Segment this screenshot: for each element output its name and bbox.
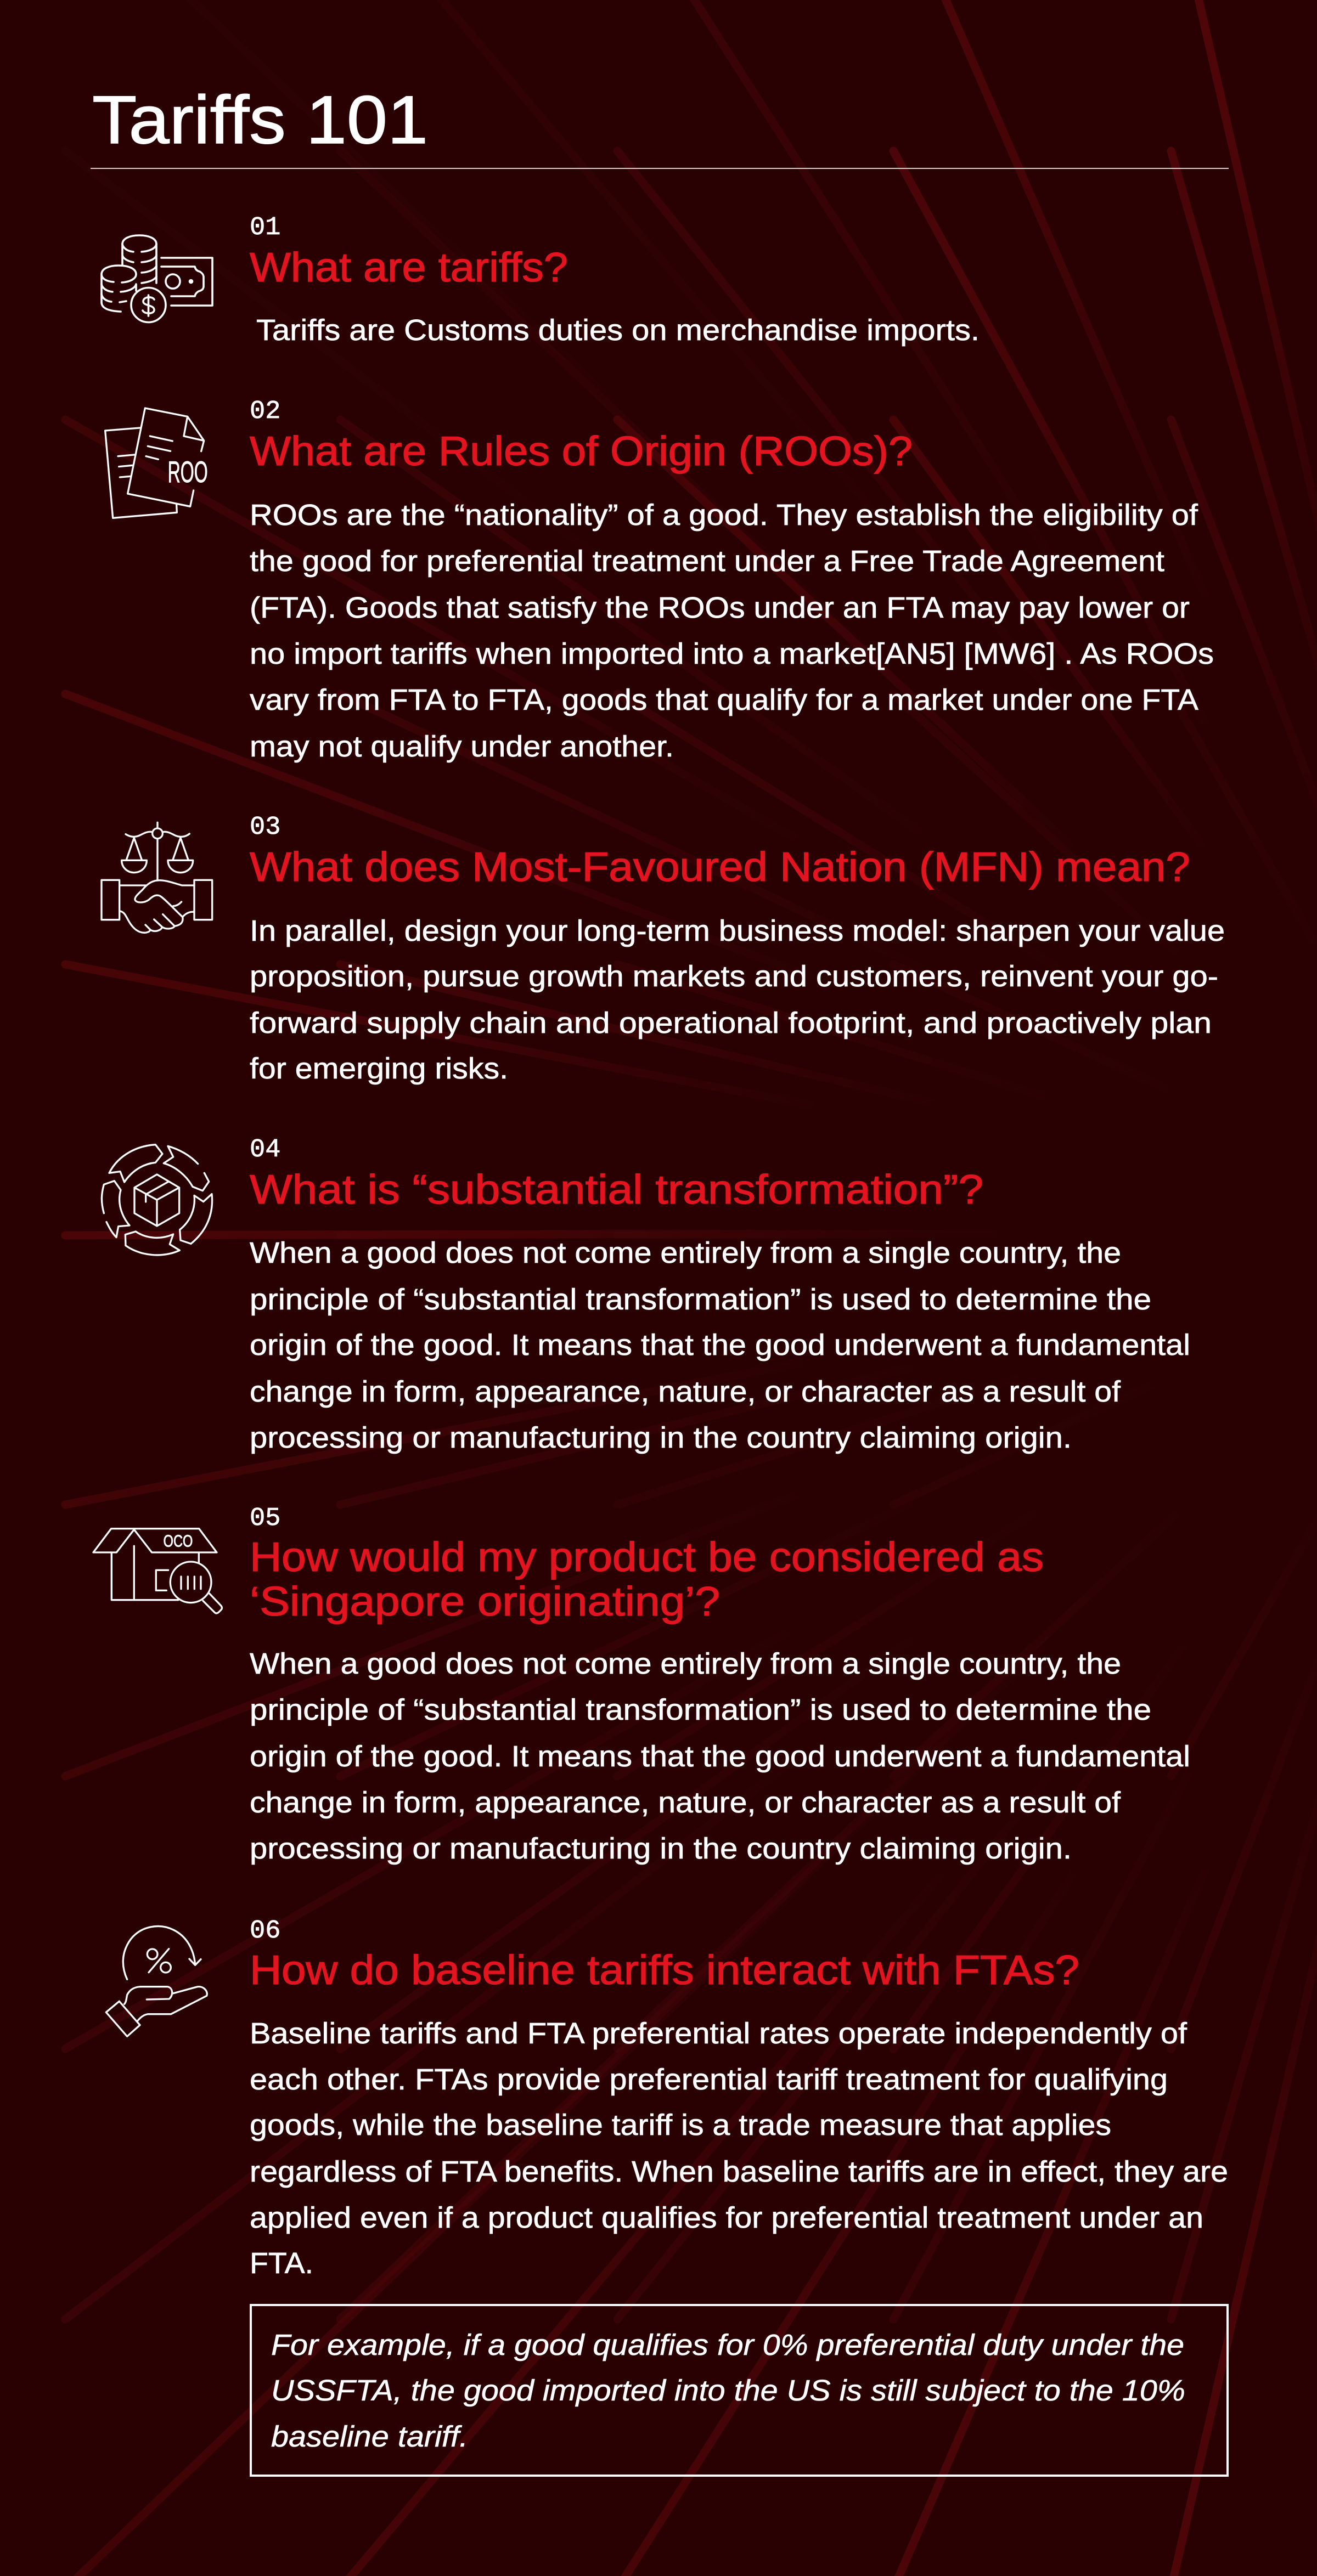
body 02: ROOs are the “nationality” of a good. They establish the eligibility of bbox=[250, 499, 1198, 532]
callout: example box bbox=[251, 2305, 1228, 2476]
body 03: In parallel, design your long-term business model: sharpen your value bbox=[250, 914, 1225, 947]
heading 03: What does Most-Favoured Nation (MFN) mean? bbox=[250, 844, 1190, 890]
icon: box with magnifier bbox=[93, 1529, 222, 1613]
body 06: FTA. bbox=[250, 2247, 313, 2280]
body 03: for emerging risks. bbox=[250, 1052, 508, 1085]
body 02: no import tariffs when imported into a market[AN5] [MW6] . As ROOs bbox=[250, 637, 1214, 670]
body 04: processing or manufacturing in the country claiming origin. bbox=[250, 1421, 1072, 1454]
number 02: 02 bbox=[250, 397, 280, 426]
icon: box with magnifier: OCO bbox=[164, 1531, 193, 1550]
section 03 bbox=[102, 813, 1225, 1085]
body 02: (FTA). Goods that satisfy the ROOs under an FTA may pay lower or bbox=[250, 591, 1190, 624]
callout: example box: USSFTA, the good imported into the US is still subject to the 10% bbox=[271, 2374, 1185, 2407]
body 06: goods, while the baseline tariff is a trade measure that applies bbox=[250, 2109, 1111, 2142]
body 04: principle of “substantial transformation” is used to determine the bbox=[250, 1283, 1151, 1316]
body 05: change in form, appearance, nature, or character as a result of bbox=[250, 1786, 1121, 1819]
heading 01: What are tariffs? bbox=[250, 244, 568, 290]
number 06: 06 bbox=[250, 1917, 280, 1946]
body 05: When a good does not come entirely from a single country, the bbox=[250, 1647, 1121, 1680]
icon: scales and handshake bbox=[102, 822, 212, 933]
heading 05 bbox=[250, 1534, 1044, 1624]
section 02 bbox=[105, 397, 1214, 763]
number 04: 04 bbox=[250, 1136, 280, 1165]
icon: box with circular arrows bbox=[102, 1145, 212, 1255]
number 03: 03 bbox=[250, 813, 280, 842]
callout: example box: For example, if a good qualifies for 0% preferential duty under the bbox=[271, 2329, 1184, 2362]
section 01 bbox=[102, 213, 980, 347]
section 04 bbox=[102, 1136, 1190, 1454]
body 06: Baseline tariffs and FTA preferential rates operate independently of bbox=[250, 2017, 1187, 2050]
icon: ROO documents: ROO bbox=[168, 455, 208, 489]
body 03: forward supply chain and operational footprint, and proactively plan bbox=[250, 1007, 1212, 1040]
body 04: change in form, appearance, nature, or character as a result of bbox=[250, 1375, 1121, 1408]
number 05: 05 bbox=[250, 1504, 280, 1533]
body 05: origin of the good. It means that the good underwent a fundamental bbox=[250, 1740, 1190, 1773]
body 04: origin of the good. It means that the good underwent a fundamental bbox=[250, 1329, 1190, 1362]
body 03: proposition, pursue growth markets and customers, reinvent your go- bbox=[250, 960, 1218, 993]
heading 02: What are Rules of Origin (ROOs)? bbox=[250, 428, 913, 474]
title: Tariffs 101 bbox=[92, 82, 428, 158]
icon: ROO documents bbox=[105, 408, 208, 518]
body 05: principle of “substantial transformation” is used to determine the bbox=[250, 1693, 1151, 1726]
heading 05: ‘Singapore originating’? bbox=[250, 1578, 720, 1624]
icon: coins and banknote bbox=[102, 235, 212, 323]
body 04: When a good does not come entirely from a single country, the bbox=[250, 1236, 1121, 1269]
body 06 bbox=[250, 2017, 1228, 2280]
body 04 bbox=[250, 1236, 1190, 1454]
icon: hand with percent bbox=[106, 1927, 207, 2036]
body 02: the good for preferential treatment under a Free Trade Agreement bbox=[250, 545, 1164, 578]
body 02 bbox=[250, 499, 1214, 763]
body 03 bbox=[250, 914, 1225, 1085]
section 06 bbox=[106, 1917, 1228, 2476]
body 02: vary from FTA to FTA, goods that qualify for a market under one FTA bbox=[250, 683, 1198, 716]
heading 06: How do baseline tariffs interact with FTAs? bbox=[250, 1947, 1079, 1993]
body 05: processing or manufacturing in the country claiming origin. bbox=[250, 1832, 1072, 1865]
body 05 bbox=[250, 1647, 1190, 1865]
body 06: applied even if a product qualifies for preferential treatment under an bbox=[250, 2201, 1203, 2234]
body 01: Tariffs are Customs duties on merchandise imports. bbox=[256, 314, 980, 347]
number 01: 01 bbox=[250, 213, 280, 242]
body 02: may not qualify under another. bbox=[250, 730, 674, 763]
heading 05: How would my product be considered as bbox=[250, 1534, 1044, 1580]
body 06: each other. FTAs provide preferential tariff treatment for qualifying bbox=[250, 2063, 1168, 2096]
heading 04: What is “substantial transformation”? bbox=[250, 1166, 983, 1212]
body 06: regardless of FTA benefits. When baseline tariffs are in effect, they are bbox=[250, 2155, 1228, 2188]
callout: example box: baseline tariff. bbox=[271, 2420, 468, 2453]
section 05 bbox=[93, 1504, 1190, 1865]
